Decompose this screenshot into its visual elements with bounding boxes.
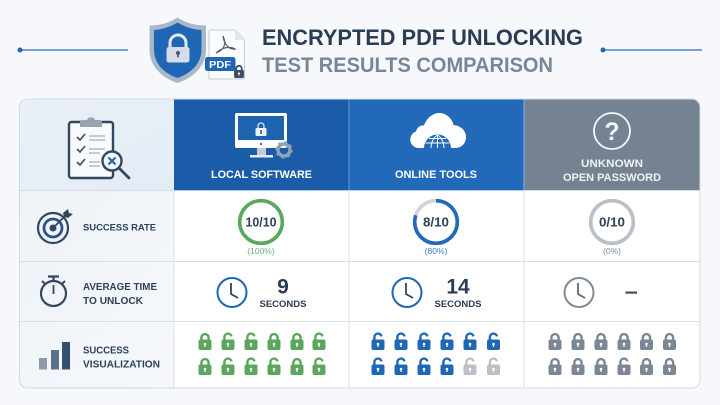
row label: success rate: SUCCESS RATE — [83, 222, 156, 234]
lock grid: unknown open password — [548, 334, 676, 375]
comparison table — [19, 99, 701, 389]
success ring: local software: 10/10 — [246, 216, 277, 230]
icon: monitor with lock and gear — [235, 113, 292, 158]
row label: success visualization: VISUALIZATION — [83, 360, 160, 370]
column header: online tools: ONLINE TOOLS — [395, 169, 477, 181]
icon: cloud with globe — [410, 113, 466, 148]
icon: stopwatch — [41, 276, 66, 306]
column header: online tools — [395, 113, 477, 181]
success ring: unknown open password: (0%) — [603, 246, 621, 256]
time: local software — [218, 276, 306, 310]
row label: average time to unlock: TO UNLOCK — [83, 296, 144, 307]
lock grid: online tools — [372, 334, 500, 375]
icon: blue clock — [218, 278, 246, 307]
row label: success rate — [38, 209, 156, 243]
success ring: unknown open password: 0/10 — [599, 216, 625, 230]
column header: local software: LOCAL SOFTWARE — [211, 169, 312, 181]
time: local software: SECONDS — [260, 299, 306, 310]
time: online tools: 14 — [446, 276, 470, 298]
row label: success visualization: SUCCESS — [83, 346, 129, 356]
success ring: local software: (100%) — [247, 246, 275, 256]
icon: clipboard with magnifier — [69, 117, 129, 178]
title: ENCRYPTED PDF UNLOCKING — [262, 25, 583, 50]
left header rule — [18, 48, 128, 52]
time: local software: 9 — [277, 276, 289, 298]
row label: average time to unlock — [41, 276, 157, 307]
row label: success visualization — [39, 342, 160, 370]
success ring: online tools: 8/10 — [423, 216, 449, 230]
column header: unknown open password: UNKNOWN — [581, 158, 643, 170]
column header: unknown open password — [563, 113, 661, 184]
column header: unknown open password: OPEN PASSWORD — [563, 172, 661, 184]
icon: question mark circle: ? — [604, 118, 620, 146]
success ring: unknown open password — [591, 201, 633, 256]
icon: shield with padlock — [150, 18, 206, 83]
right header rule — [600, 48, 702, 52]
lock grid: local software — [198, 334, 326, 375]
time: online tools — [392, 276, 482, 310]
row label: average time to unlock: AVERAGE TIME — [83, 282, 157, 293]
subtitle: TEST RESULTS COMPARISON — [262, 54, 553, 77]
time: unknown open password — [564, 278, 637, 307]
no data dash — [626, 292, 637, 294]
success ring: local software — [240, 201, 282, 256]
icon: target with arrow — [38, 209, 73, 243]
column header: local software — [211, 113, 312, 181]
success ring: online tools — [415, 201, 457, 256]
icon: PDF document — [205, 30, 244, 79]
success ring: online tools: (80%) — [425, 246, 447, 256]
PDF tag: PDF — [209, 59, 232, 71]
icon: blue clock — [392, 278, 422, 307]
icon: bar chart — [39, 342, 70, 370]
icon: gray clock — [564, 278, 594, 307]
title — [262, 25, 583, 77]
time: online tools: SECONDS — [434, 299, 482, 310]
